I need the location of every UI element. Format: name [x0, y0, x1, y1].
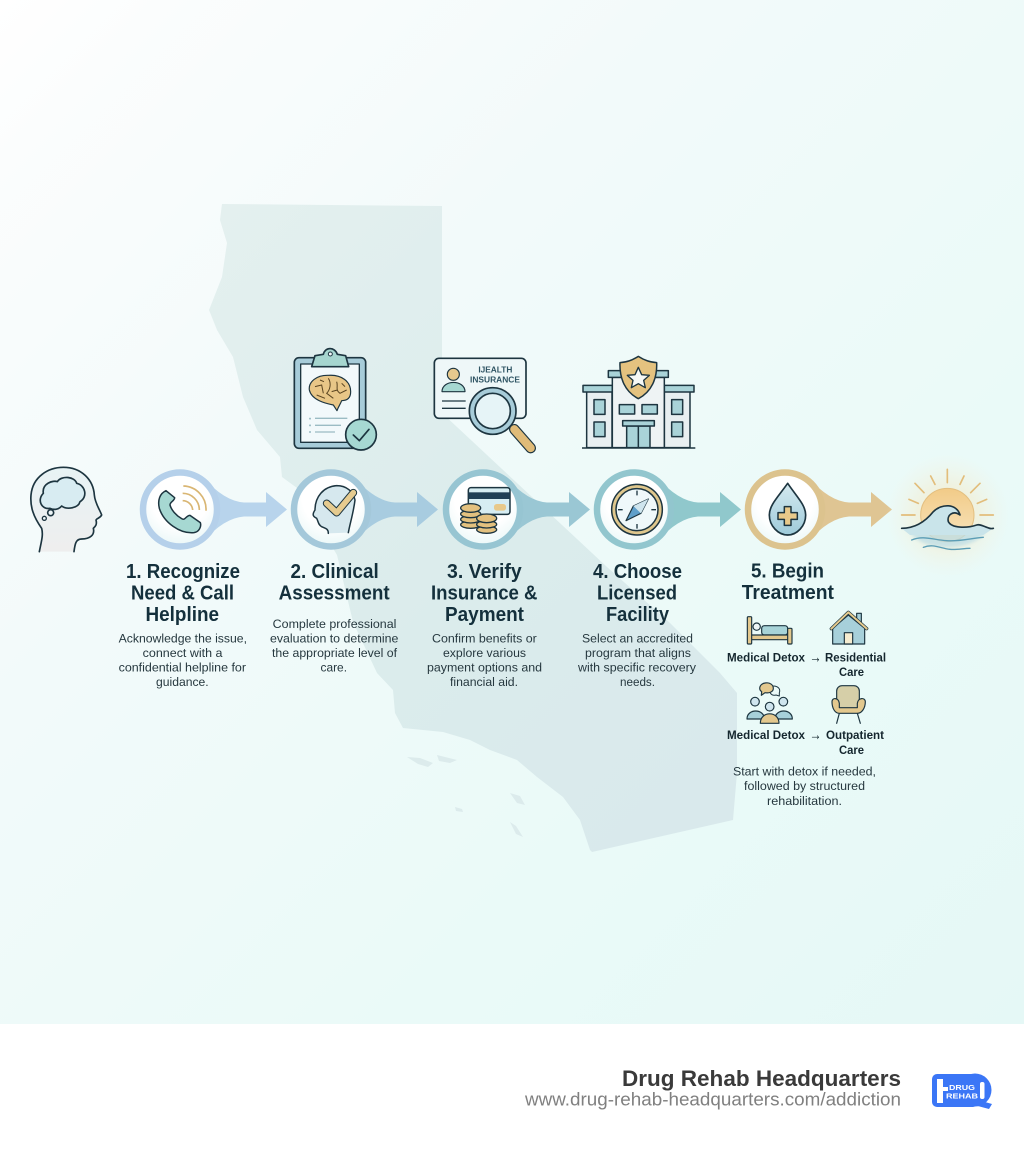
icon: medical drop: [769, 483, 806, 535]
step 1 heading: 1. Recognize: [126, 561, 240, 583]
panel: step 4: [577, 356, 741, 689]
step 3 heading: Payment: [445, 604, 524, 626]
step 4 heading: 4. Choose: [593, 561, 682, 583]
step 2 description: [270, 617, 399, 674]
step 2 heading: [279, 561, 390, 604]
step 4 description: needs.: [620, 675, 655, 689]
step 5 heading: 5. Begin: [751, 560, 824, 582]
icon: health insurance card with magnifier: [434, 358, 531, 448]
icon: house: [831, 612, 867, 644]
step 4 description: program that aligns: [585, 646, 691, 660]
icon: sunrise over wave: [886, 453, 1009, 577]
icon: clipboard with brain: [294, 349, 376, 450]
step 2 description: care.: [320, 660, 347, 674]
logo: Drug Rehab HQ: DRUG: [949, 1083, 975, 1092]
step 3 heading: Insurance &: [431, 582, 538, 604]
step 3 ring and arrow: [446, 472, 590, 546]
step 4 heading: [593, 561, 682, 626]
step 1 description: guidance.: [156, 675, 209, 689]
step 4 description: with specific recovery: [577, 660, 697, 674]
step 2 heading: 2. Clinical: [290, 561, 379, 583]
step 2 ring and arrow: [294, 472, 438, 546]
step 1 heading: Need & Call: [131, 582, 234, 604]
step 4 heading: Facility: [606, 604, 670, 626]
step 5 description: followed by structured: [744, 779, 865, 793]
care pathway: residential: [727, 648, 886, 679]
step 5 ring and arrow: [748, 472, 892, 546]
panel: step 2: [270, 349, 438, 674]
step 2 description: Complete professional: [273, 617, 396, 631]
care pathway: residential: →: [810, 648, 822, 666]
care pathway: outpatient: Outpatient: [826, 729, 884, 742]
step 3 heading: [431, 561, 538, 626]
icon: licensed facility building with shield: [582, 356, 695, 448]
step 2 description: the appropriate level of: [272, 646, 398, 660]
logo: Drug Rehab HQ: [932, 1074, 992, 1109]
step 4 description: [577, 632, 697, 689]
care pathway: outpatient: Medical Detox: [727, 729, 806, 742]
step 5 description: rehabilitation.: [767, 794, 842, 808]
step 5 description: Start with detox if needed,: [733, 764, 876, 778]
step 2 heading: Assessment: [279, 582, 390, 604]
step 3 description: explore various: [443, 646, 526, 660]
panel: step 1: [119, 472, 287, 689]
icon: bed: [747, 617, 792, 644]
step 4 ring and arrow: [597, 472, 741, 546]
icon: health insurance card with magnifier: INSURANCE: [470, 375, 521, 384]
icon: head with check mark: [313, 486, 355, 533]
icon: armchair: [832, 686, 865, 723]
step 1 ring and arrow: [143, 472, 287, 546]
step 1 heading: [126, 561, 240, 626]
logo: Drug Rehab HQ: REHAB: [946, 1092, 979, 1100]
step 3 description: [427, 632, 542, 689]
step 3 description: payment options and: [427, 660, 542, 674]
step 1 description: confidential helpline for: [119, 660, 246, 674]
step 4 heading: Licensed: [597, 582, 677, 604]
background map: California: [209, 204, 737, 852]
care pathway: outpatient: →: [810, 725, 822, 744]
step 5 description: [733, 764, 876, 808]
care pathway: outpatient: Care: [839, 744, 865, 757]
care pathway: residential: Medical Detox: [727, 652, 806, 664]
care pathway: residential: Residential: [825, 652, 886, 664]
step 3 description: financial aid.: [450, 675, 518, 689]
step 1 description: connect with a: [143, 646, 223, 660]
step 1 heading: Helpline: [146, 604, 219, 626]
panel: step 5: [727, 472, 892, 808]
icon: head with thought cloud: [31, 467, 102, 552]
icon: credit card and coins: [461, 488, 510, 533]
step 2 description: evaluation to determine: [270, 632, 399, 646]
footer band: [0, 1024, 1024, 1154]
care pathway: outpatient: [727, 725, 884, 757]
panel: step 3: [427, 358, 590, 689]
care pathway: residential: Care: [839, 666, 865, 679]
icon: phone: [159, 486, 206, 533]
step 5 heading: [742, 560, 834, 604]
icon: health insurance card with magnifier: IJEALTH: [478, 365, 513, 374]
footer: organisation name: Drug Rehab Headquarters: [622, 1066, 901, 1091]
step 5 heading: Treatment: [742, 582, 834, 604]
footer: website: www.drug-rehab-headquarters.com/addiction: [524, 1088, 901, 1110]
step 3 description: Confirm benefits or: [432, 632, 537, 646]
step 1 description: Acknowledge the issue,: [119, 632, 247, 646]
step 4 description: Select an accredited: [582, 632, 693, 646]
step 3 heading: 3. Verify: [447, 561, 523, 583]
icon: support group: [747, 683, 792, 723]
step 1 description: [119, 632, 247, 689]
icon: compass: [612, 484, 662, 535]
